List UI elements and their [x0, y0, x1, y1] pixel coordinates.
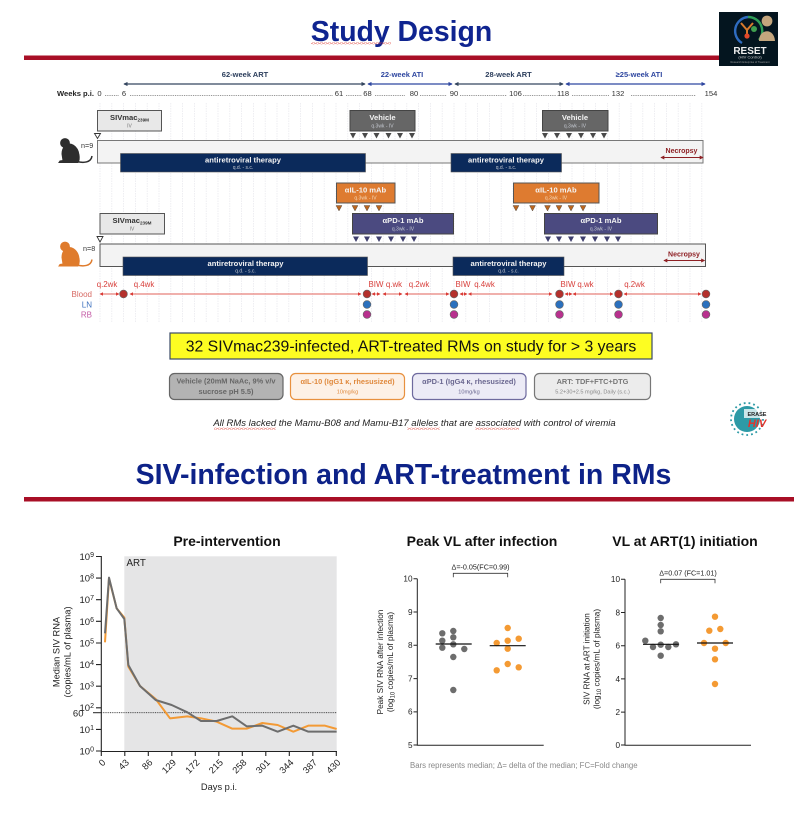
legend: vehicle: Vehicle (20mM NaAc, 9% v/v	[176, 376, 276, 386]
sampling interval labels	[97, 280, 645, 289]
y tick labels	[403, 574, 413, 750]
weeks axis: 132	[612, 89, 624, 98]
footnote: bars legend: Bars represents median; Δ= delta of the median; FC=Fold change	[410, 761, 638, 770]
ART bar 1: q.d. - s.c.	[235, 268, 256, 274]
comparison bracket: Δ=0.07 (FC=1.01)	[659, 568, 717, 578]
anti-PD-1 box 1	[352, 214, 454, 234]
weeks axis: 61	[335, 89, 343, 98]
y tick labels: 9	[90, 552, 94, 559]
y tick labels: 7	[408, 674, 413, 684]
anti-PD-1 box 1: q.3wk - IV	[392, 226, 415, 232]
sampling interval labels: q.4wk	[474, 280, 495, 289]
callout: yellow banner: 32 SIVmac239-infected, ART-treated RMs on study for > 3 years	[186, 338, 636, 356]
title: Study Design: Study Design	[311, 16, 492, 48]
necropsy	[661, 148, 703, 158]
section rule	[24, 497, 794, 502]
y tick labels: 6	[615, 642, 620, 650]
icon: orange monkey	[59, 242, 92, 266]
legend: anti-IL-10: αIL-10 (IgG1 κ, rhesusized)	[300, 377, 395, 386]
orange points and median	[490, 625, 526, 674]
anti-PD-1 box 1: αPD-1 mAb	[383, 216, 424, 225]
logo: RESET HIV Control	[719, 12, 778, 66]
ART bar 2: q.d. - s.c.	[498, 268, 519, 274]
ART bar 1	[120, 154, 366, 172]
comparison bracket: Δ=-0.05(FC=0.99)	[452, 562, 509, 572]
necropsy: Necropsy	[668, 252, 700, 258]
ART bar 2: antiretroviral therapy	[471, 259, 547, 268]
icon: black monkey	[59, 139, 92, 162]
vertical week gridlines	[100, 103, 702, 322]
panel: treatment group	[59, 183, 706, 276]
y axis title: (log	[386, 698, 395, 712]
n=9 label: n=9	[81, 141, 93, 150]
anti-IL-10 box 2	[514, 183, 599, 203]
axis titles: (copies/mL of plasma)	[62, 606, 72, 698]
chart: pre-intervention line chart	[52, 533, 343, 792]
y axis title: SIV RNA at ART initiation	[582, 613, 592, 705]
logo: ERASE HIV: HIV	[748, 418, 768, 430]
heading: SIV-infection and ART-treatment: SIV-infection and ART-treatment in RMs	[136, 459, 671, 491]
phase timeline: ≥25-week ATI	[616, 70, 662, 79]
sample row labels: Blood	[72, 290, 92, 299]
sampling interval labels: q.4wk	[134, 280, 154, 289]
legend: ART	[534, 374, 650, 400]
legend: anti-IL-10: 10mg/kg	[337, 390, 358, 396]
axis titles: Median SIV RNA	[52, 616, 62, 687]
logo: ERASE HIV	[731, 403, 770, 435]
y tick labels: 10	[403, 574, 413, 584]
gray points and median	[436, 628, 472, 693]
logo: ERASE HIV: ERASE	[748, 412, 767, 418]
sample row labels	[72, 290, 92, 320]
gray points and median	[642, 615, 679, 659]
sample row labels: LN	[82, 300, 92, 310]
x tick labels: 172	[183, 757, 202, 776]
sampling interval labels: q.wk	[386, 280, 402, 289]
y axis title: 10	[390, 691, 396, 698]
x tick labels: 301	[254, 757, 272, 776]
y tick labels: 10	[80, 682, 90, 692]
open triangle	[94, 134, 100, 138]
y axis title: 10	[597, 688, 603, 695]
vehicle box 2: Vehicle	[562, 113, 588, 122]
y tick labels: 6	[90, 617, 94, 624]
open triangle	[97, 236, 103, 242]
vehicle box 1: q.3wk - IV	[371, 124, 394, 130]
y tick labels: 10	[80, 617, 90, 628]
logo: RESET HIV Control: RESET	[733, 46, 767, 57]
legend: ART: ART: TDF+FTC+DTG	[557, 377, 629, 386]
SIVmac challenge box: SIVmac	[110, 113, 137, 122]
header rule	[24, 56, 720, 60]
necropsy: Necropsy	[666, 148, 698, 155]
x tick labels: 129	[160, 757, 178, 776]
chart: VL at ART initiation	[582, 533, 758, 750]
anti-PD-1 box 2: αPD-1 mAb	[581, 216, 622, 225]
anti-IL-10 box 1	[336, 183, 395, 203]
vehicle box 2: q.3wk - IV	[564, 124, 587, 130]
y tick labels: 6	[408, 708, 413, 716]
chart title: VL at ART(1) initiation	[612, 533, 758, 549]
y tick labels: 10	[80, 595, 90, 606]
y tick labels: 7	[90, 595, 94, 602]
y tick labels: 8	[90, 574, 94, 580]
panel: sampling schedule	[72, 280, 710, 320]
legend: anti-PD-1	[412, 374, 526, 400]
y tick labels: 10	[80, 574, 90, 584]
x tick labels: 86	[140, 757, 155, 772]
gray series	[105, 578, 337, 732]
y tick labels: 2	[615, 708, 620, 717]
y tick labels: 0	[615, 741, 620, 750]
anti-IL-10 box 2: αIL-10 mAb	[535, 186, 577, 194]
necropsy	[664, 252, 704, 260]
weeks axis: 118	[557, 89, 569, 98]
ART bar 1: antiretroviral therapy	[208, 259, 284, 268]
phase timeline: 22-week ATI	[381, 70, 423, 79]
weeks axis: 154	[705, 89, 717, 98]
y tick labels: 10	[80, 725, 90, 736]
logo: RESET HIV Control: Research Enterprise of Treatment	[731, 60, 770, 64]
x tick labels: 430	[324, 757, 343, 776]
legend: ART: 5.2+30+2.5 mg/kg, Daily (s.c.)	[555, 390, 630, 396]
y tick labels: 10	[80, 660, 90, 671]
x tick labels: 215	[207, 757, 225, 776]
vehicle box 1: Vehicle	[369, 113, 396, 122]
x tick labels: 344	[277, 757, 296, 776]
weeks axis: 90	[450, 89, 458, 98]
axes	[96, 556, 337, 756]
axes and ticks	[414, 579, 544, 745]
limit of detection line: 60	[73, 708, 84, 720]
ART bar 2: q.d. - s.c.	[496, 165, 516, 171]
sampling interval labels: q.2wk	[97, 280, 117, 289]
ART bar 1: antiretroviral therapy	[205, 156, 282, 164]
y tick labels	[80, 552, 94, 758]
SIVmac challenge box: IV	[127, 124, 133, 130]
x tick labels: 258	[230, 757, 249, 776]
sampling interval labels: BIW	[561, 280, 576, 289]
anti-IL-10 dose triangles	[336, 206, 586, 211]
weeks axis	[57, 89, 717, 98]
y tick labels: 1	[90, 725, 94, 732]
ART bar 2	[451, 154, 562, 172]
SIVmac challenge box: IV	[130, 226, 135, 232]
study bar	[98, 140, 703, 163]
y tick labels: 10	[611, 575, 620, 584]
sampling interval arrows	[100, 293, 701, 295]
y axis title	[376, 609, 396, 714]
y tick labels: 4	[615, 675, 620, 684]
SIVmac challenge box: SIVmac	[113, 216, 140, 225]
ART shaded region	[124, 556, 337, 751]
y tick labels: 10	[80, 552, 90, 563]
weeks axis: 0	[97, 89, 102, 98]
anti-IL-10 box 1: αIL-10 mAb	[345, 186, 387, 194]
anti-PD-1 box 2: q.3wk - IV	[590, 226, 613, 232]
y tick labels: 4	[90, 660, 94, 667]
anti-PD-1 dose triangles	[353, 236, 621, 242]
lymph node sample dots	[363, 301, 710, 308]
legend: vehicle: sucrose pH 5.5)	[198, 387, 254, 396]
sampling interval labels: q.2wk	[409, 280, 429, 289]
axis titles	[52, 606, 237, 792]
x tick labels: 43	[117, 757, 131, 772]
callout: yellow banner	[170, 333, 652, 359]
legend: anti-PD-1: 10mg/kg	[458, 390, 480, 396]
legend: anti-PD-1: αPD-1 (IgG4 κ, rhesusized)	[422, 377, 516, 386]
sampling interval labels: q.wk	[577, 280, 594, 289]
y axis title: copies/mL of plasma)	[386, 612, 395, 692]
logo: RESET HIV Control: (HIV Control)	[738, 54, 762, 60]
weeks axis: 68	[363, 89, 372, 98]
sample row labels: RB	[81, 310, 92, 320]
comparison bracket	[659, 568, 717, 583]
y tick labels: 3	[90, 682, 94, 688]
sampling interval labels: q.2wk	[624, 280, 645, 289]
anti-IL-10 box 2: q.3wk - IV	[545, 196, 568, 202]
SIVmac challenge box	[100, 214, 164, 234]
y axis title: (log	[592, 695, 602, 709]
y axis title: copies/mL of plasma)	[592, 609, 602, 689]
y tick labels: 9	[408, 608, 413, 617]
rectal biopsy sample dots	[363, 311, 710, 318]
phase timeline: 62-week ART	[222, 70, 269, 79]
y tick labels: 8	[408, 641, 413, 650]
axis titles: Days p.i.	[201, 782, 237, 792]
ART bar 2	[453, 257, 564, 276]
ART bar 1: q.d. - s.c.	[233, 165, 253, 171]
n=8 label: n=8	[83, 244, 95, 253]
ART shaded region: ART	[126, 558, 146, 569]
x tick labels: 0	[97, 757, 108, 768]
legend: vehicle	[170, 374, 283, 400]
y axis title: Peak SIV RNA after infection	[376, 609, 385, 714]
y tick labels: 10	[80, 746, 90, 758]
x tick labels: 387	[301, 757, 319, 776]
vehicle box 1	[350, 110, 415, 131]
y tick labels: 10	[80, 703, 90, 714]
y tick labels: 5	[90, 638, 94, 646]
blood sample dots	[120, 290, 710, 298]
y tick labels: 2	[90, 703, 94, 710]
chart title: Peak VL after infection	[407, 533, 557, 549]
SIVmac challenge box: 239M	[137, 118, 149, 122]
weeks axis: 6	[122, 89, 126, 98]
footnote: alleles: All RMs lacked the Mamu-B08 and Mamu-B17 alleles that are associated with control of viremia	[212, 418, 616, 429]
x tick labels	[97, 757, 343, 776]
orange points and median	[697, 614, 733, 687]
axes and ticks	[621, 579, 751, 745]
sampling interval labels: BIW	[456, 280, 471, 289]
chart: peak VL after infection	[376, 533, 557, 750]
weeks axis: Weeks p.i.	[57, 89, 94, 98]
anti-PD-1 box 2	[544, 214, 658, 234]
y tick labels: 8	[615, 608, 620, 618]
SIVmac challenge box: 239M	[140, 220, 152, 226]
vehicle box 2	[542, 110, 608, 131]
chart title: Pre-intervention	[173, 533, 281, 549]
legend: anti-IL-10	[290, 374, 404, 400]
orange series	[105, 578, 337, 732]
phase timeline: 28-week ART	[485, 70, 532, 79]
y tick labels: 10	[80, 638, 90, 650]
weeks axis: 80	[410, 89, 418, 98]
comparison bracket	[452, 562, 509, 577]
y tick labels: 0	[90, 746, 94, 754]
anti-IL-10 box 1: q.3wk - IV	[354, 196, 377, 202]
sampling interval labels: BIW	[369, 280, 384, 289]
y axis title	[582, 609, 603, 709]
phase timeline	[124, 70, 705, 84]
vehicle dose triangles	[350, 133, 607, 138]
y tick labels	[611, 575, 620, 750]
ART bar 2: antiretroviral therapy	[468, 156, 545, 164]
ART bar 1	[123, 257, 368, 276]
SIVmac challenge box	[98, 110, 162, 131]
study bar	[100, 244, 706, 266]
weeks axis: 106	[509, 89, 522, 98]
y tick labels: 5	[408, 741, 413, 750]
panel: vehicle group	[59, 110, 703, 172]
